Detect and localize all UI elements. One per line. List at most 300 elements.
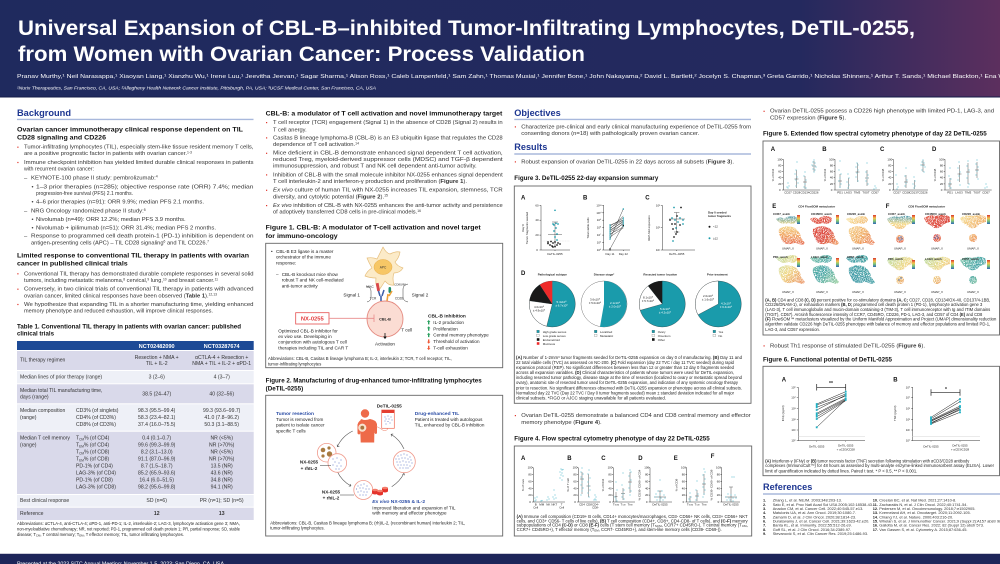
text: drug-enhanced TIL: Patient is treated with autologous	[415, 417, 483, 422]
table 1: 99.6 (99.3–99.9)	[138, 443, 176, 449]
chart E: CD8 memory subsets: 100	[681, 466, 686, 470]
text block: limited response to TIL therapy: memory phenotype and reduced exhaustion, will improve clinical responses.	[24, 309, 213, 315]
text: phenotype bullet: memory phenotype (Figure 4).	[521, 420, 602, 426]
chart A: immune composition: NK	[546, 502, 550, 506]
references list: 15.	[873, 518, 878, 524]
chart A: tumor fragments seeded: A	[521, 195, 526, 201]
table abbreviations: disease; T	[17, 532, 36, 537]
chart B: CD4 exhaustion: 100	[829, 157, 834, 161]
figure 4 caption: subpopulations of CD4 (C-D) or CD8 (E-F) cells (T stem cell memory (T	[517, 522, 651, 528]
chart B: CD4 exhaustion: TIM3	[854, 190, 861, 194]
chart C: CD8 costimulatory: 60	[888, 170, 892, 174]
panel letters: D	[638, 456, 643, 462]
text: phenotype bullet: Ovarian DeTIL-0255 demonstrate a balanced CD4 and CD8 central memory and effector	[521, 413, 751, 419]
references list: 17.	[873, 527, 878, 532]
text block: limited response to TIL therapy: ovarian cancer, limited clinical responses have been observed (Table 1).	[24, 293, 209, 299]
chart B: total viable cells	[583, 195, 630, 256]
text block: limited response to TIL therapy: lung,	[149, 278, 163, 284]
chart A: immune composition: MM	[539, 502, 545, 506]
panel F: CD8 UMAP plots: LAG3_asinh	[925, 257, 942, 261]
text: Th1 bullet: Robust Th1 response of stimulated DeTIL-0255 ( Figure 6).	[770, 343, 925, 349]
chart D: CD8 exhaustion: LAG3	[955, 190, 963, 194]
chart C: CD8 costimulatory: 100	[887, 157, 893, 161]
chart A: tumor fragments seeded	[521, 195, 570, 256]
table 1: 8.2 (3.1–13.0)	[141, 450, 173, 456]
chart D: stem-like CD4: 60	[645, 479, 649, 483]
chart C: CD8 costimulatory: % of CD8	[881, 168, 885, 181]
text block: CBL-B bullets: Inhibition of CBL-B with the small molecule inhibitor NX-0255 enhances signal dependent	[273, 172, 503, 178]
text block: limited response to TIL therapy: 12,13	[209, 293, 217, 297]
label: DeTIL-0255: DeTIL-0255	[377, 404, 402, 409]
table 1: 13.5 (NR)	[211, 463, 233, 469]
panel F: CD8 UMAP plots: CD45RO_asinh	[925, 212, 946, 216]
chart C: REP fold expansion	[645, 195, 695, 256]
table 1: 37.4 (16.0–75.5)	[138, 422, 176, 428]
text block: limited response to TIL therapy: tumors, including metastatic melanoma,	[24, 278, 126, 284]
text block: ovarian cancer immunotherapy: 1–3 prior therapies (n=285); objective response rate (ORR) 7.4%; median	[36, 184, 254, 190]
panel F: CD8 UMAP plots: CD8 FlowSOM metacluster	[908, 205, 946, 209]
chart F: stem-like CD8: 60	[717, 479, 720, 483]
text block: limited response to TIL therapy: 9	[147, 277, 149, 281]
figure 5 caption	[765, 297, 997, 332]
chart C: REP fold expansion: 10³	[656, 203, 660, 207]
panel letters: C	[880, 147, 885, 153]
text: CD226 bullet	[764, 109, 994, 121]
text block: ovarian cancer immunotherapy: 4–6 prior therapies (n=91): ORR 9.9%; median PFS 2.1 months.	[36, 200, 204, 206]
chart D: CD8 exhaustion: 40	[940, 176, 943, 180]
NX-0255 inhibitor box: NX-0255	[301, 317, 325, 323]
text block: ovarian cancer immunotherapy: 6	[164, 240, 166, 244]
chart A: CD4 costimulatory: CD28	[793, 190, 801, 194]
figure 4 caption: , CCR7+ CD45RO-), T central memory (T	[662, 522, 742, 528]
panel E: CD4 UMAP plots: PD1_asinh	[773, 255, 788, 259]
panel F: CD8 UMAP plots	[886, 204, 990, 294]
chart D: CD8 exhaustion: 60	[940, 170, 943, 174]
icon: patient	[358, 409, 377, 442]
pie: resected tumor location: 5.2x10⁹	[660, 307, 671, 311]
chart B: T cell composition: 100	[573, 466, 578, 470]
chart B: TNF: 10³	[906, 406, 910, 410]
pie legends: Mucinous	[543, 342, 556, 346]
chart A: IFN gamma: A	[782, 378, 787, 384]
text: results bullet: Robust expansion of ovarian DeTIL-0255 in 22 days across all subsets (Figure 3).	[521, 159, 734, 165]
icon: infusion bag	[376, 410, 394, 431]
text block: CBL-B bullets: 15	[384, 194, 388, 198]
icon: antigen presenting cell	[365, 247, 403, 290]
chart D: CD8 exhaustion: 80	[940, 163, 943, 167]
chart E: CD8 memory subsets	[674, 466, 708, 506]
list: CBL-B inhibition effects: Threshold of activation	[433, 339, 480, 344]
chart E: CD8 memory subsets: T CM	[695, 502, 700, 506]
references list: Zhang L, et al. NEJM. 2003;348:203-13.	[773, 498, 842, 503]
chart D: CD8 exhaustion: 20	[940, 182, 943, 186]
chart A: immune composition: Cell	[533, 506, 539, 510]
text: ex vivo expansion	[372, 499, 456, 516]
pie: pathological subtype: 5.4x10⁸	[557, 300, 567, 304]
pie: resected tumor location: Resected tumor location	[643, 272, 677, 276]
chart C: CD4 memory subsets: T CM	[621, 502, 626, 506]
chart C: CD8 costimulatory: 40	[888, 176, 892, 180]
chart A: IFN gamma: + αCD3/CD28	[837, 448, 855, 452]
chart C: CD8 costimulatory: CD226	[918, 190, 928, 194]
pie: prior treatment: 2.0x10⁸	[703, 294, 714, 298]
chart C: REP fold expansion: DeTIL-0255	[669, 252, 685, 256]
text block: CBL-B bullets: T cell anergy.	[273, 127, 307, 133]
chart A: IFN gamma: 10⁴	[791, 396, 796, 400]
chart B: TNF: DeTIL-0255	[923, 444, 939, 448]
text: drug-enhanced TIL: TIL, enhanced by CBL-B inhibition	[415, 423, 485, 428]
table 1: CD8% (of CD3%)	[76, 422, 116, 428]
icon: T cell	[367, 301, 412, 337]
panel E: CD4 UMAP plots: CD45RO_asinh	[811, 212, 832, 216]
chart A: immune composition: 100	[528, 466, 533, 470]
chart A: CD4 costimulatory: 60	[778, 170, 782, 174]
chart B: total viable cells: 10⁹	[597, 218, 602, 222]
chart B: CD4 exhaustion: 60	[830, 170, 833, 174]
authors: Pranav Murthy,¹ Neil Narasappa,¹ Xiaoyan Liang,¹ Xianzhu Wu,¹ Irene Luu,¹ Jeevitha Jeevan,¹ Sagar Sharma,¹ Alison Ross,¹ Caleb Lampenfeld,¹ Sam Zahn,¹ Thomas Musial,¹ Jennifer Bone,¹ John Nakayama,² David L. Bartlett,² Jocelyn S. Chapman,³ Greta Garrido,¹ Nicholas Shinners,¹ Arthur T. Sands,¹ Michael Blackton,¹ Ena Wang,¹	[17, 74, 1000, 80]
chart A: tumor fragments seeded: 40	[535, 218, 539, 222]
text: tumor resection: specific T cells	[276, 428, 306, 433]
pie: resected tumor location: ± 4.2x10⁹	[659, 310, 672, 314]
chart C: CD4 memory subsets: 60	[608, 479, 612, 483]
figure 2 title: Figure 2. Manufacturing of drug-enhanced tumor-infiltrating lymphocytes	[266, 379, 482, 385]
label: NX-0255 + rhIL-2 (liberation)	[300, 460, 331, 471]
chart C: CD4 memory subsets: T SCM	[613, 502, 619, 506]
chart B: total viable cells: 10⁸	[597, 226, 602, 230]
table 1: NCT03287674	[204, 344, 241, 350]
pie: pathological subtype: ± 4.9x10⁸	[533, 308, 546, 312]
icon: receptors and signals: Signal 1	[343, 293, 360, 298]
figure 4 caption: SCM	[655, 524, 662, 528]
text block: ovarian cancer immunotherapy: are a positive prognostic factor in patients with ovarian cancer.	[24, 151, 184, 157]
icon: receptors and signals: MHC	[366, 285, 374, 289]
chart A: immune composition: 80	[528, 472, 532, 476]
heading: CBL-B modulator: CBL-B: a modulator of T cell activation and novel immunotherapy target	[266, 110, 503, 117]
chart A: CD4 costimulatory: 100	[777, 157, 783, 161]
panel: background column	[17, 108, 254, 538]
table 1: PR (n=1); SD (n=5)	[200, 498, 244, 504]
panel letters: A	[521, 456, 526, 462]
chart B: CD4 exhaustion: 80	[830, 163, 833, 167]
pie: disease stage: ± 5.0x10⁸	[589, 301, 602, 305]
table 1: 50.3 (3.1–88.5)	[204, 422, 239, 428]
text block: ovarian cancer immunotherapy: Ovarian cancer immunotherapy clinical response dependent on TIL	[17, 126, 243, 133]
chart C: CD4 memory subsets: % of CD4	[601, 478, 605, 491]
chart C: CD4 memory subsets: 100	[608, 466, 613, 470]
text block: optimized inhibitor: ex vivo use. Developing in	[278, 334, 332, 339]
chart B: total viable cells: 10¹⁰	[596, 211, 603, 215]
text block: limited response to TIL therapy: 11	[215, 277, 218, 281]
text block: ovarian cancer immunotherapy: Tumor-infiltrating lymphocytes (TIL), especially stem-like tissue resident memory T cells,	[24, 145, 254, 151]
chart B: CD4 exhaustion: 20	[830, 182, 833, 186]
panel F: CD8 UMAP plots: PD1_asinh	[888, 257, 903, 261]
table 1: Resection + NMA +	[135, 355, 179, 361]
chart B: T cell composition: % of T cell	[566, 478, 570, 492]
label: NX-0255 + rhIL-2 (expansion)	[322, 489, 354, 500]
text block: limited response to TIL therapy: Limited response to conventional TIL therapy in patients with ovarian	[17, 253, 249, 260]
table 1: CD4% (of CD3%)	[76, 415, 116, 421]
text block: ovarian cancer immunotherapy: CD28 signaling and CD226	[17, 135, 106, 142]
references list: 13.	[873, 510, 878, 515]
figure 5 title: Figure 5. Extended flow spectral cytometry phenotype of day 22 DeTIL-0255	[763, 131, 987, 137]
table 1: SD (n=6)	[146, 498, 167, 504]
chart B: TNF: *	[945, 387, 947, 393]
table 1: TIL therapy regimen	[20, 358, 66, 364]
table 1: T	[76, 443, 79, 449]
chart C: CD8 costimulatory	[881, 157, 928, 194]
figure 5 caption: (LAG-3), T cell immunoglobulin and mucin-domain containing-3 (TIM-3), T cell immunoreceptor with Ig and ITIM domains	[765, 307, 990, 312]
table 1	[17, 341, 254, 520]
table 1: 41.0 (7.8–96.2)	[204, 415, 239, 421]
text: tumor resection	[276, 411, 325, 433]
chart A: CD4 costimulatory: 40	[778, 176, 782, 180]
table 1: Reference	[20, 511, 44, 517]
table 1: % (of CD4)	[84, 443, 109, 449]
text block: CBL-B bullets: Ex vivo culture of human TIL with NX-0255 increases TIL expansion, stemness, TCR	[273, 188, 503, 194]
chart B: T cell composition: CD4-	[592, 502, 599, 506]
figure 3 caption: clinical subsets. *FIGO or AJCC staging unavailable for all patients evaluated.	[516, 396, 666, 400]
table 1: CM	[79, 452, 84, 456]
pie: disease stage	[581, 272, 627, 327]
references list: Kverneland AH, et al. Oncotarget. 2020;11:2092-105.	[879, 510, 971, 515]
pie: pathological subtype	[529, 272, 575, 327]
text block: CBL-B bullets: diversity, and cytolytic potential ( Figure 2).	[273, 194, 384, 200]
chart A: IFN gamma	[781, 378, 865, 452]
table 1: % (of CD8)	[84, 450, 110, 456]
chart legend: fragments seeded: <12	[713, 225, 718, 229]
figure 3 caption: including resected tumor pathology, disease stage at the time of resection (localized to ovary or metastatic spread beyond	[516, 375, 743, 380]
text block: CBL-B bullets: Casitas B lineage lymphoma-B (CBL-B) is an E3 ubiquitin ligase that regulates the CD28	[273, 135, 503, 141]
text block: ovarian cancer immunotherapy: Immune checkpoint inhibition has yielded limited durable clinical responses in patients	[24, 160, 254, 166]
pie legends: High grade serous	[543, 330, 567, 334]
figure 4 caption: cells, and CD3+ CD56- T cells of live cells), (B) T cell composition (CD4+, CD8+, CD4-CD8- of T cells), and (C-F) memory	[517, 518, 749, 523]
references list: 8.	[763, 527, 766, 532]
figure 2 title	[266, 379, 482, 392]
figure 2 abbreviations: Abbreviations: CBL-B, Casitas B lineage lymphoma B; (rh)IL-2, (recombinant human) interleukin 2; TIL,	[270, 520, 465, 525]
intro text: CBL-B knockout mice show	[282, 272, 339, 277]
references list: Van Gassen S, et al. Cytometry A. 2015;87:636-45.	[879, 527, 967, 532]
chart C: CD4 memory subsets: T EM	[628, 502, 633, 506]
icon: receptors and signals	[343, 282, 429, 302]
icon: T cell: T cell	[401, 328, 412, 333]
chart A: tumor fragments seeded: DeTIL-0255	[547, 252, 563, 256]
pie: resected tumor location: 8.1x10⁸	[643, 296, 654, 300]
panel E: CD4 UMAP plots: CD4 FlowSOM metacluster	[798, 205, 836, 209]
icon: receptors and signals: CD28	[395, 296, 403, 300]
chart B: total viable cells: Day 11	[606, 252, 615, 256]
list: CBL-B inhibition effects: CBL-B inhibition	[428, 313, 466, 319]
text: drug-enhanced TIL	[415, 411, 485, 428]
pie: pathological subtype: ± 6.7x10⁸	[555, 304, 568, 308]
table 1 title: Table 1. Conventional TIL therapy in patients with ovarian cancer: published	[17, 324, 241, 330]
pie: prior treatment	[695, 272, 741, 327]
icon: antigen presenting cell: APC	[380, 266, 387, 270]
chart B: TNF: + αCD3/CD28	[951, 448, 969, 452]
table 1: T	[76, 457, 79, 463]
figure 6 caption	[765, 459, 995, 473]
chart A: CD4 costimulatory: 20	[778, 182, 782, 186]
chart C: REP fold expansion: C	[645, 195, 650, 201]
table 1: 43.6 (NR)	[211, 470, 233, 476]
text block: CBL-B bullets: T cell interleukin-2 and interferon-γ production and proliferation ( Figure 1).	[273, 179, 467, 185]
table 1: 13	[219, 511, 225, 517]
table 1 title	[17, 324, 241, 338]
chart B: total viable cells: 10⁵	[597, 248, 602, 252]
panel letters: D	[932, 147, 937, 153]
table 1: 0.4 (0.1–0.7)	[142, 435, 171, 441]
chart B: TNF: 10⁰	[906, 439, 911, 443]
text: ex vivo expansion: Improved liberation and expansion of TIL	[372, 505, 456, 510]
panel letters: B	[822, 147, 827, 153]
panel E: CD4 UMAP plots: UMAP_X	[852, 246, 864, 250]
table 1: 98.3 (95.5–99.4)	[138, 408, 176, 414]
table 1: EM	[79, 459, 84, 463]
chart A: immune composition: B	[535, 502, 537, 506]
chart B: T cell composition	[566, 466, 600, 510]
table 1: Median lines of prior therapy (range)	[20, 375, 102, 381]
chart A: CD4 costimulatory: % of CD4	[771, 168, 775, 181]
chart A: immune composition: % of Live	[521, 479, 525, 491]
panel E: CD4 UMAP plots: UMAP_X	[816, 290, 828, 294]
chart A: CD4 costimulatory: CD27	[784, 190, 792, 194]
chart A: IFN gamma: DeTIL-0255	[838, 444, 854, 448]
table abbreviations: , T effector memory; TIL, tumor infiltrating lymphocytes.	[84, 532, 184, 537]
pie: prior treatment: Prior treatment	[707, 272, 728, 276]
figure 6 caption: (A) Interferon-γ (IFNγ) or (B) tumor necrosis factor (TNF) secretion following stimulation with αCD3/CD28 antibody	[765, 459, 970, 464]
references list	[763, 498, 1000, 536]
references list: Zamarin D, et al. J Clin Oncol. 2020;38:1814-23.	[773, 514, 856, 519]
chart legend: fragments seeded: Day 0 seeded	[708, 210, 727, 214]
pie legends: Metastatic	[600, 334, 614, 338]
text block: limited response to TIL therapy: We hypothesize that expanding TIL in a shorter manufacturing time, yielding enhanced	[24, 302, 254, 308]
chart D: stem-like CD4: 40	[645, 486, 649, 490]
chart F: stem-like CD8: 40	[717, 486, 720, 490]
table 1: NR (>70%)	[209, 443, 235, 449]
panel E: CD4 UMAP plots: UMAP_X	[782, 290, 794, 294]
figure 4 panel	[514, 446, 752, 536]
icon: expanded T cells	[393, 451, 415, 473]
table 1: Median T cell memory	[20, 435, 70, 441]
figure 1 panel	[266, 243, 503, 368]
figure 3 caption: ovary), anatomic site of resected tumor used for DeTIL-0255 expansion, and indication of any systemic oncology therapy	[516, 380, 739, 385]
table 1 title: clinical trials	[17, 332, 55, 338]
chart E: CD8 memory subsets: 40	[682, 486, 685, 490]
intro text: robust T and NK cell-mediated	[282, 278, 344, 283]
figure 4 title: Figure 4. Flow spectral cytometry phenotype of day 22 DeTIL-0255	[514, 437, 710, 443]
chart F: stem-like CD8: 80	[717, 472, 720, 476]
chart D: stem-like CD4: 20	[645, 493, 649, 497]
references list: Goff SL, et al. J Clin Oncol. 2016;34:2389-97.	[773, 527, 851, 532]
pie legends: Low grade serous	[543, 334, 566, 338]
text: CD226 bullet: Ovarian DeTIL-0255 possess a CD226 high phenotype with limited PD-1, LAG-3, and	[770, 109, 994, 115]
chart B: CD4 exhaustion: CD57	[871, 190, 879, 194]
figure 2 panel	[266, 395, 503, 536]
text block: optimized inhibitor	[278, 328, 348, 350]
table 1: 16.4 (6.0–51.5)	[139, 477, 174, 483]
panel E: CD4 UMAP plots: E	[772, 204, 776, 210]
text block: ovarian cancer immunotherapy: 7	[207, 240, 209, 244]
affiliations: ¹Nurix Therapeutics, San Francisco, CA, USA; ²Allegheny Health Network Cancer Institute, Pittsburgh, PA, USA; ³UCSF Medical Center, San Francisco, CA, USA	[17, 86, 376, 90]
figure 5 caption: CD226/DNAM-1), or exhaustion markers (B, D; programmed cell death protein 1 (PD-1), lymphocyte activation gene 3	[765, 302, 983, 307]
panel F: CD8 UMAP plots: CCR7_asinh	[888, 212, 905, 216]
chart D: stem-like CD4	[638, 466, 672, 506]
references list: 9.	[763, 531, 766, 536]
chart B: TNF: B	[893, 378, 898, 384]
references list: Duraiswamy J, et al. Cancer Cell. 2021;39:1623-42.e20.	[773, 518, 869, 524]
table 1: 58.3 (23.4–82.1)	[138, 415, 176, 421]
chart F: stem-like CD8	[710, 466, 740, 506]
table 1: LAG-3% (of CD8)	[76, 484, 116, 490]
chart A: immune composition: T	[561, 502, 563, 506]
chart B: total viable cells: 10⁶	[597, 241, 602, 245]
panel: CBL-B column	[266, 110, 503, 536]
references list: 7.	[763, 523, 766, 528]
chart B: CD4 exhaustion: TIGIT	[862, 190, 870, 194]
list: CBL-B inhibition effects: Central memory phenotype	[433, 333, 489, 338]
text: objectives bullet	[515, 124, 751, 137]
text: drug-enhanced TIL: Drug-enhanced TIL	[415, 411, 459, 417]
references list: Matulonis UA, et al. Ann Oncol. 2019;30:1080-7.	[773, 510, 856, 515]
panel E: CD4 UMAP plots: UMAP_X	[782, 246, 794, 250]
text: tumor resection: Tumor is removed from	[276, 417, 323, 422]
pie legends: Endometrioid	[543, 338, 560, 342]
table 1: % (of CD4)	[84, 435, 110, 441]
text block: ovarian cancer immunotherapy: antigen-presenting cells (APC) – TIL CD28 signaling	[31, 240, 165, 246]
figure 3 caption: 22 total viable cells (TVC) as assessed on NC-200. (C) Fold expansion (day 22 TVC / day 11 TVC seeded) during rapid	[516, 360, 735, 365]
panel E: CD4 UMAP plots: UMAP_X	[852, 290, 864, 294]
pie legends: Other	[658, 338, 665, 342]
chart B: TNF	[893, 378, 980, 452]
text block: ovarian cancer immunotherapy: •	[32, 200, 34, 206]
chart B: T cell composition: 60	[573, 479, 577, 483]
chart D label: D	[521, 271, 526, 277]
text: phenotype bullet	[515, 413, 751, 426]
list: CBL-B inhibition effects: T-cell exhaustion	[433, 345, 468, 350]
arrows: process cycle	[337, 431, 405, 487]
chart B: total viable cells: 10⁷	[597, 233, 601, 237]
figure 2 title: (DeTIL-0255)	[266, 386, 303, 392]
chart D: CD8 exhaustion	[933, 157, 992, 194]
panel letters	[521, 454, 715, 462]
icon: culture flask cells	[354, 480, 388, 500]
table 1: (range)	[20, 415, 37, 421]
chart A: CD4 costimulatory	[771, 157, 820, 194]
title	[18, 16, 915, 66]
text block: CBL-B bullets: immunosuppression, and robust T and NK cell dependent anti-tumor activity.	[273, 164, 477, 170]
chart B: TNF: 10²	[906, 417, 910, 421]
chart A: IFN gamma: 10²	[791, 417, 796, 421]
chart legend: fragments seeded	[708, 210, 731, 240]
chart C: CD4 memory subsets: 40	[608, 486, 612, 490]
references list: 6.	[763, 518, 766, 524]
table 1: 8.7 (1.5–18.7)	[141, 463, 173, 469]
intro text: •	[271, 249, 273, 254]
text block: CBL-B bullets: Mice deficient in CBL-B demonstrate enhanced signal dependent T cell activation,	[273, 151, 503, 157]
table 1: PD-1% (of CD4)	[76, 463, 113, 469]
icon: receptors and signals: TCR	[370, 296, 377, 300]
panel F: CD8 UMAP plots: UMAP_X	[931, 246, 943, 250]
figure 2 abbreviations: tumor-infiltrating lymphocytes.	[270, 525, 325, 530]
chart A: immune composition: NKT	[551, 502, 557, 506]
icon: tumor fragments	[317, 443, 336, 462]
pie: disease stage: 2.1x10⁹	[610, 301, 621, 305]
label: NX-0255 + rhIL-2 (liberation): + rhIL-2	[301, 466, 318, 471]
pie: resected tumor location	[639, 272, 685, 327]
chart C: REP fold expansion: 10¹	[656, 248, 660, 252]
label: NX-0255 + rhIL-2 (expansion): NX-0255	[322, 489, 341, 494]
table 1: days (range)	[20, 395, 49, 401]
chart D: CD8 exhaustion: TIGIT	[973, 190, 981, 194]
